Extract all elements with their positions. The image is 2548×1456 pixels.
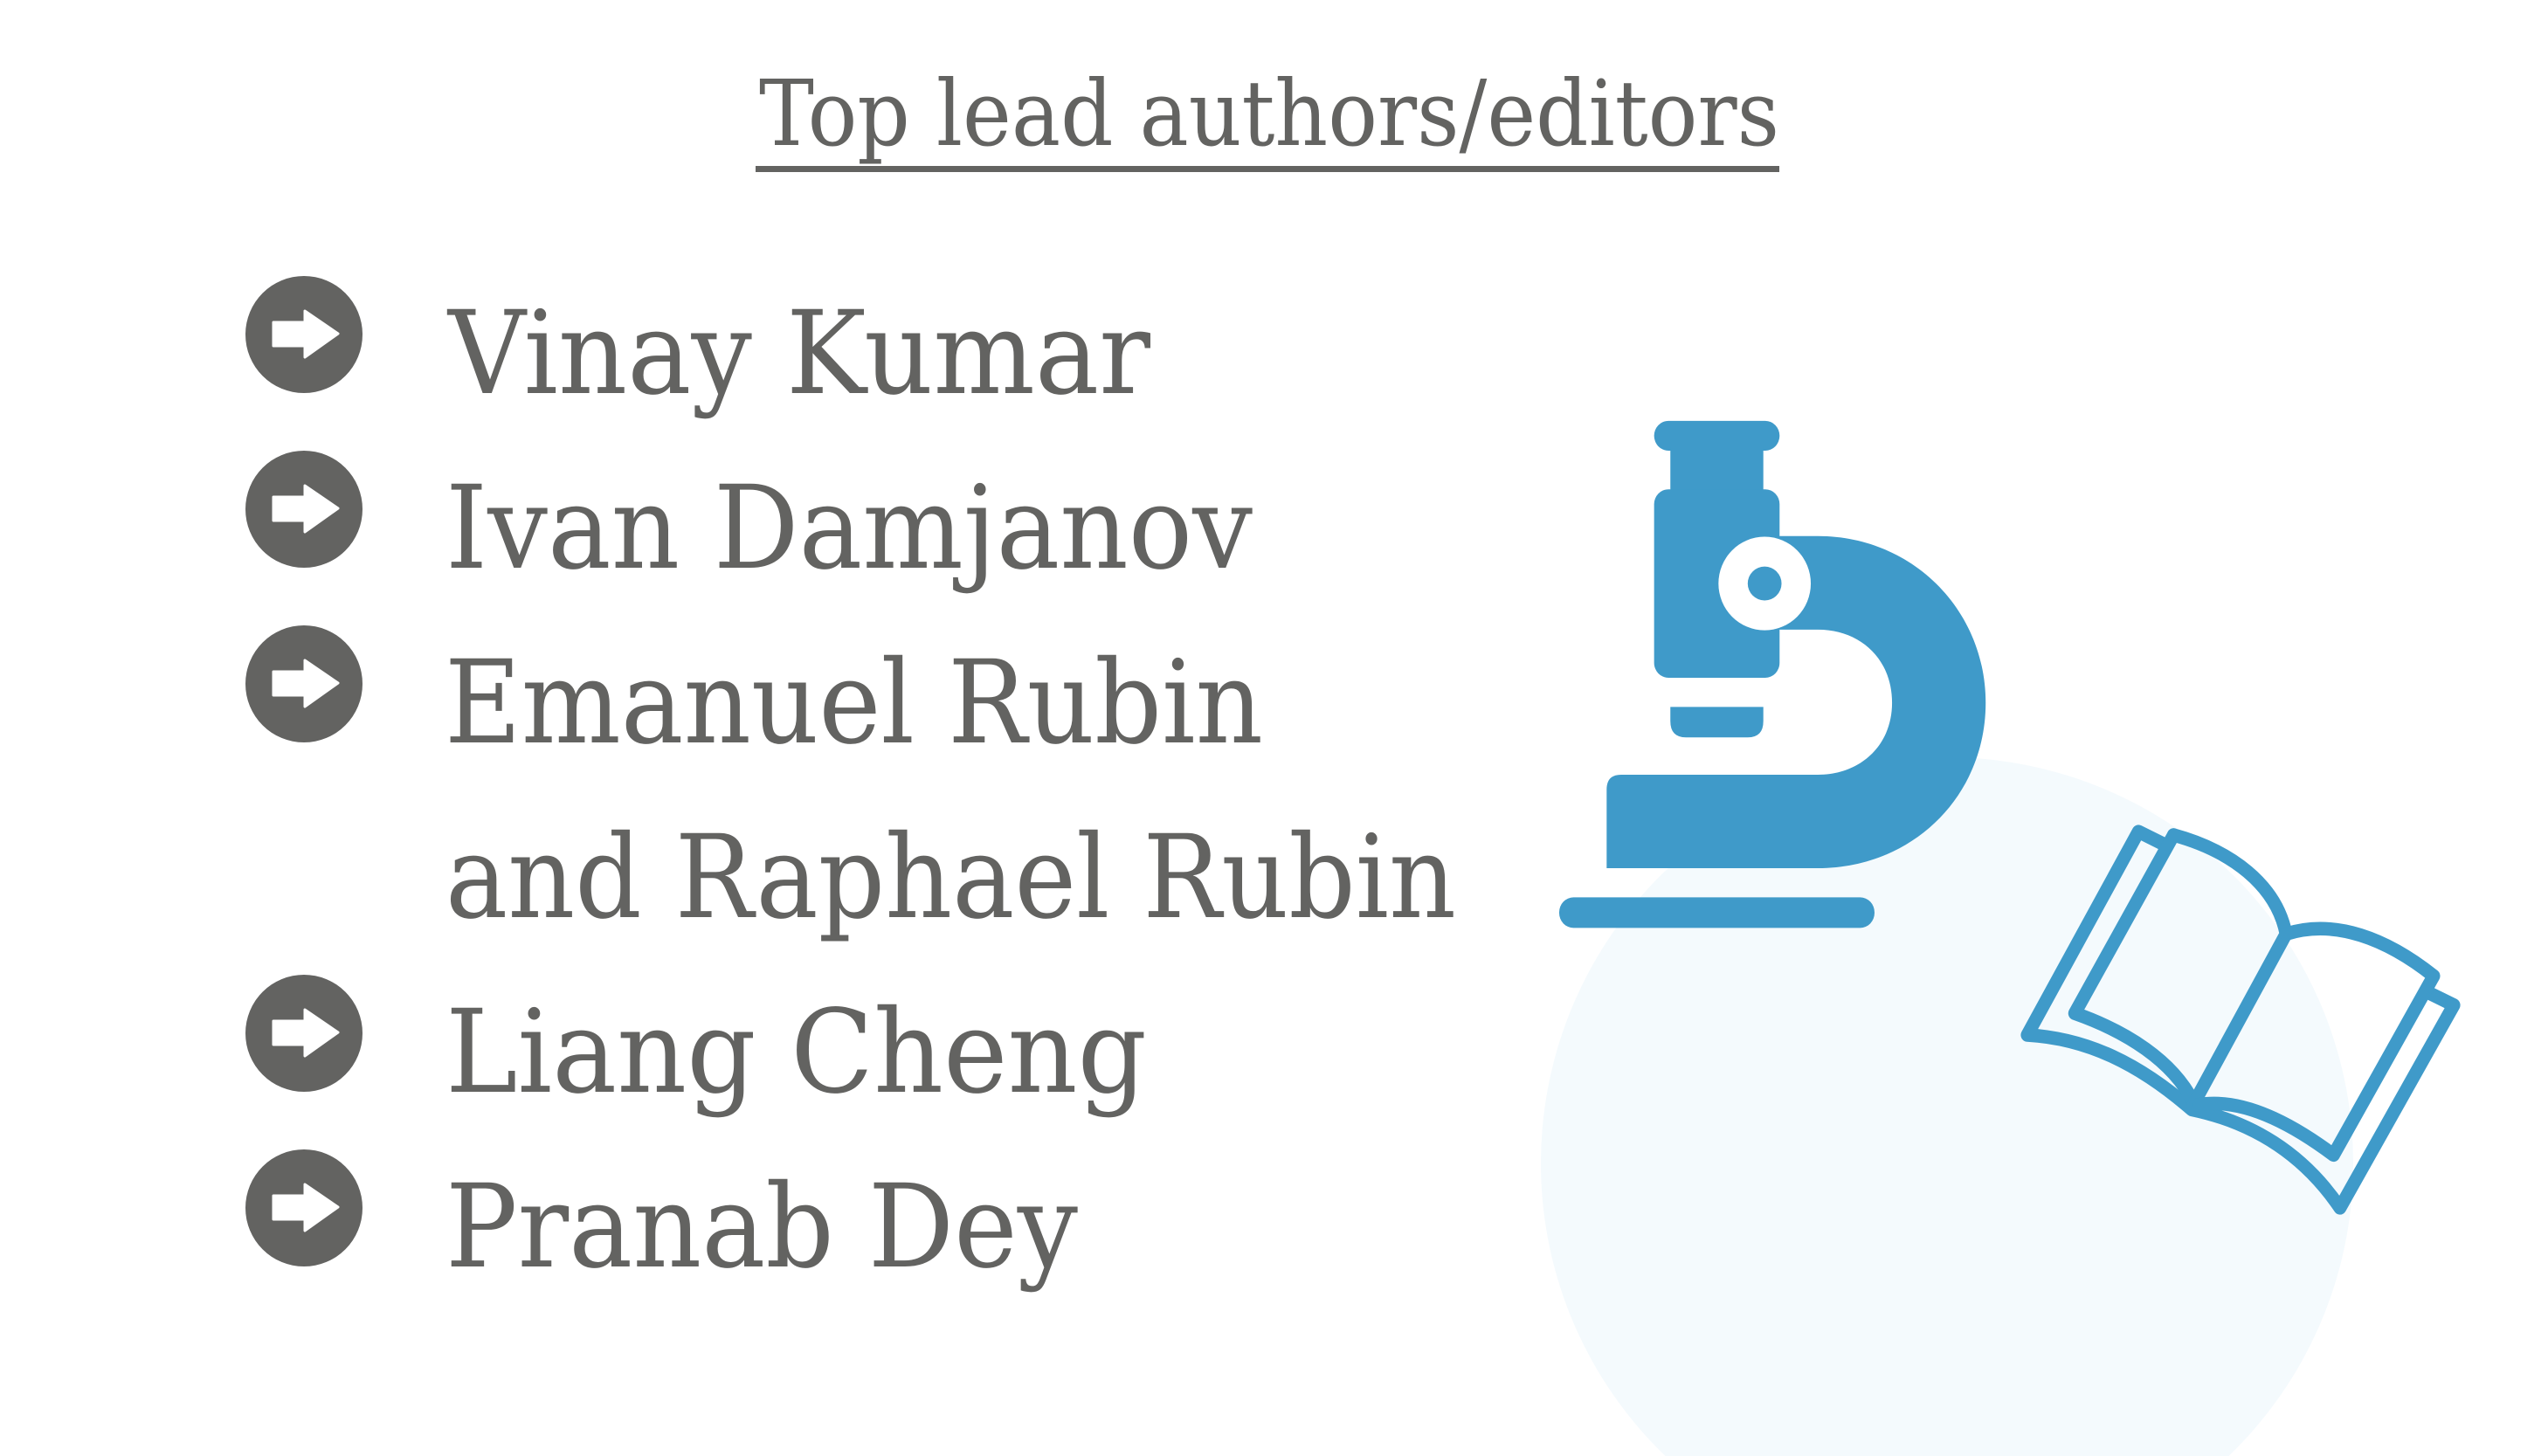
author: Pranab Dey: Pranab Dey [445, 1160, 1078, 1294]
author: Liang Cheng [245, 975, 1147, 1120]
author: Vinay Kumar [245, 276, 1151, 421]
author: Emanuel Rubin and Raphael Rubin: and Raphael Rubin [445, 811, 1456, 945]
author: Pranab Dey [245, 1149, 1078, 1294]
author: Emanuel Rubin and Raphael Rubin: Emanuel Rubin [445, 636, 1263, 770]
title: Top lead authors/editors [759, 60, 1779, 167]
author: Emanuel Rubin and Raphael Rubin [245, 625, 1456, 945]
icon: microscope [1559, 421, 1985, 928]
author: Ivan Damjanov: Ivan Damjanov [445, 461, 1253, 596]
background circle [1541, 757, 2353, 1456]
author list [245, 276, 1456, 1294]
icon: open book [2027, 832, 2454, 1208]
author: Vinay Kumar: Vinay Kumar [446, 286, 1151, 421]
author: Liang Cheng: Liang Cheng [445, 985, 1147, 1120]
